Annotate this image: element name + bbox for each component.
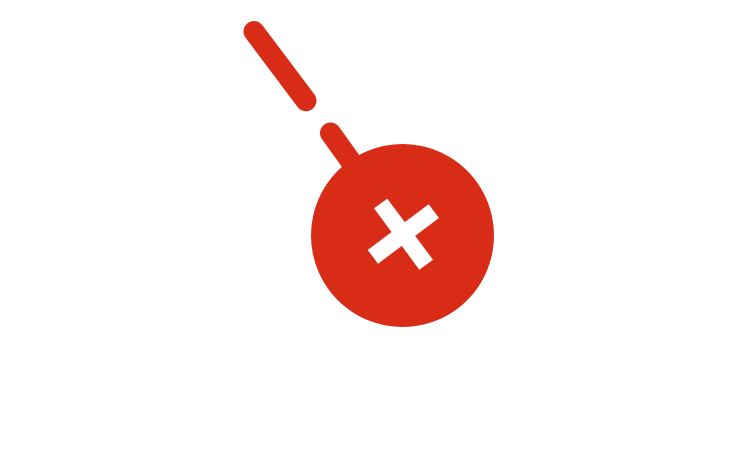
white cross (368, 199, 439, 270)
red circle (311, 144, 494, 327)
upper needle segment (254, 32, 306, 101)
lower needle segment (330, 133, 375, 195)
